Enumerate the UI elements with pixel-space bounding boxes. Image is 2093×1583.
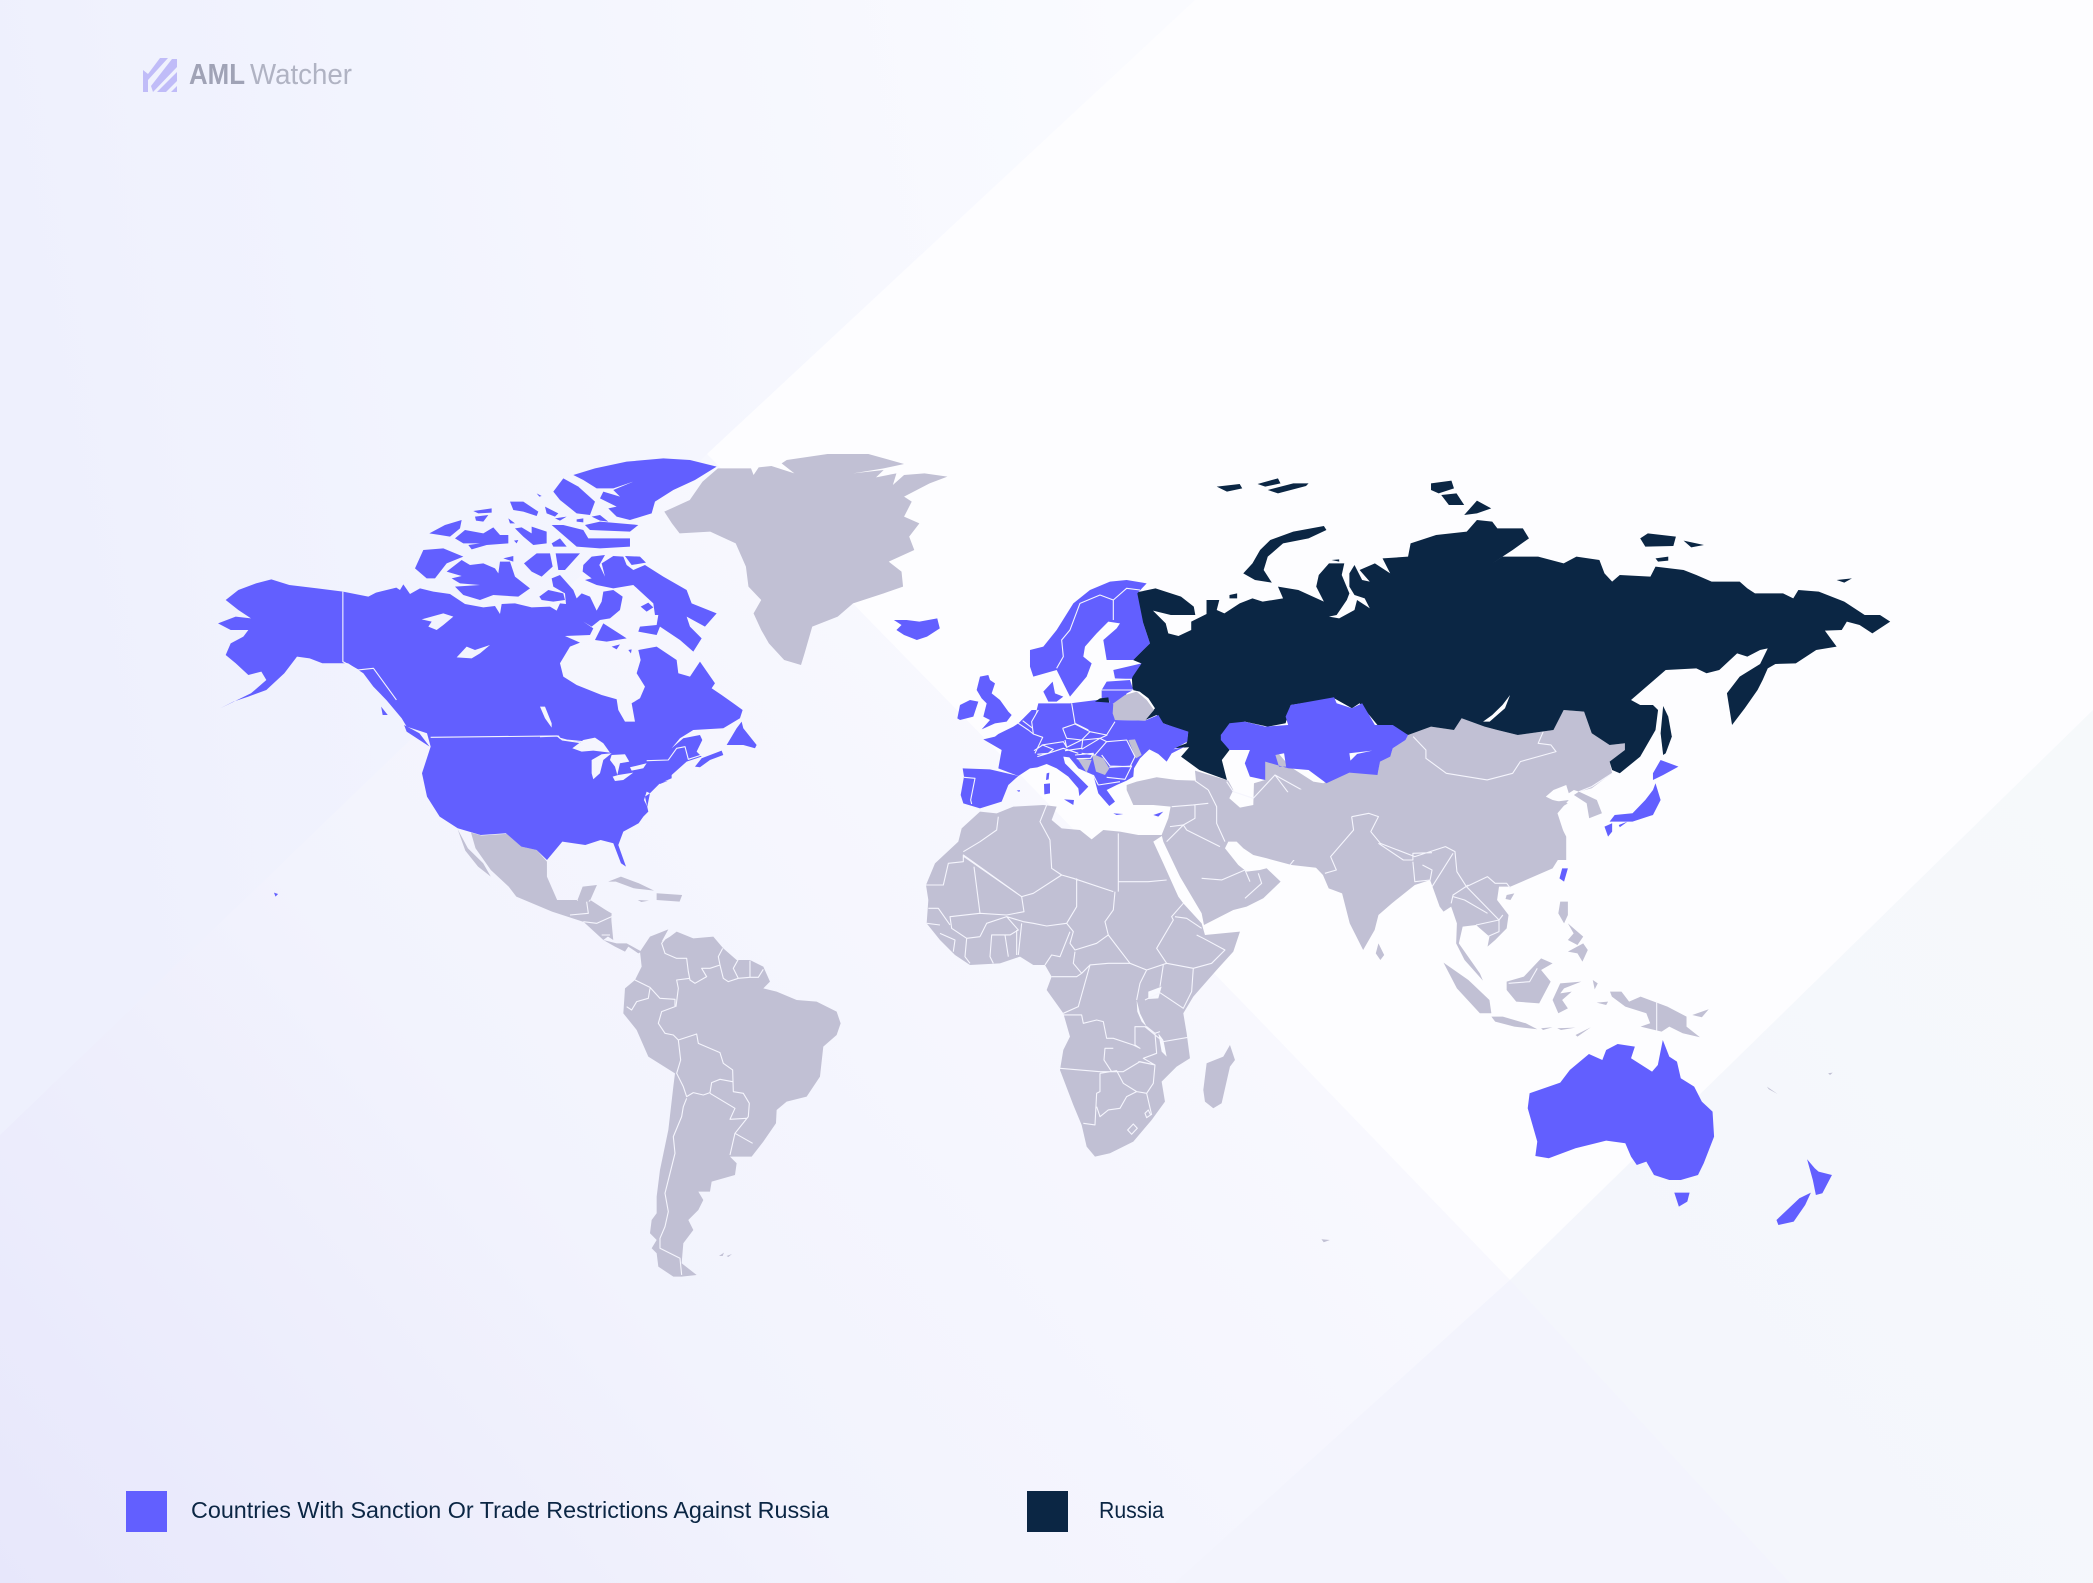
sanctioning countries: Europe: [1030, 580, 1150, 697]
Japan: [1604, 760, 1678, 837]
African lakes: [1137, 987, 1167, 1057]
world map: [218, 454, 1890, 1277]
region: Middle East and Central Asia: [1127, 748, 1400, 925]
sanctioning countries: North America: [218, 458, 757, 867]
Australia, New Zealand, Taiwan: [1528, 868, 1832, 1225]
Mexico and Caribbean: [458, 828, 682, 940]
logo: AML Watcher: [143, 58, 352, 92]
region: South and Central America: [550, 900, 841, 1277]
legend: [126, 1491, 1164, 1532]
Kazakhstan: [1221, 697, 1408, 783]
region: Africa: [926, 805, 1240, 1157]
Korea: [1574, 792, 1602, 818]
Russia: [1130, 478, 1890, 780]
Russian Arctic islands: [1217, 478, 1852, 598]
legend swatch: sanctioning countries: [126, 1491, 167, 1532]
non-sanctioning European countries: [1113, 692, 1154, 721]
logo wordmark: AML: [189, 59, 245, 91]
US-Canada eastern border: [540, 736, 702, 761]
legend label: Russia: Russia: [1099, 1497, 1164, 1523]
legend swatch: Russia: [1027, 1491, 1068, 1532]
logo: AML Watcher: Watcher: [250, 59, 352, 91]
region: South-East Asia and India: [1300, 800, 1833, 1242]
region: Greenland: [458, 454, 947, 940]
legend label: sanctioning countries: Countries With Sanction Or Trade Restrictions Against Russia: [191, 1497, 829, 1523]
icon: striped logo mark: [143, 58, 177, 92]
Pacific islands and Iceland: [274, 618, 940, 897]
Canadian Arctic islands: [415, 458, 757, 784]
Sakhalin: [1661, 706, 1672, 755]
Kaliningrad: [1095, 697, 1109, 703]
region: East Asia: [1283, 710, 1625, 860]
